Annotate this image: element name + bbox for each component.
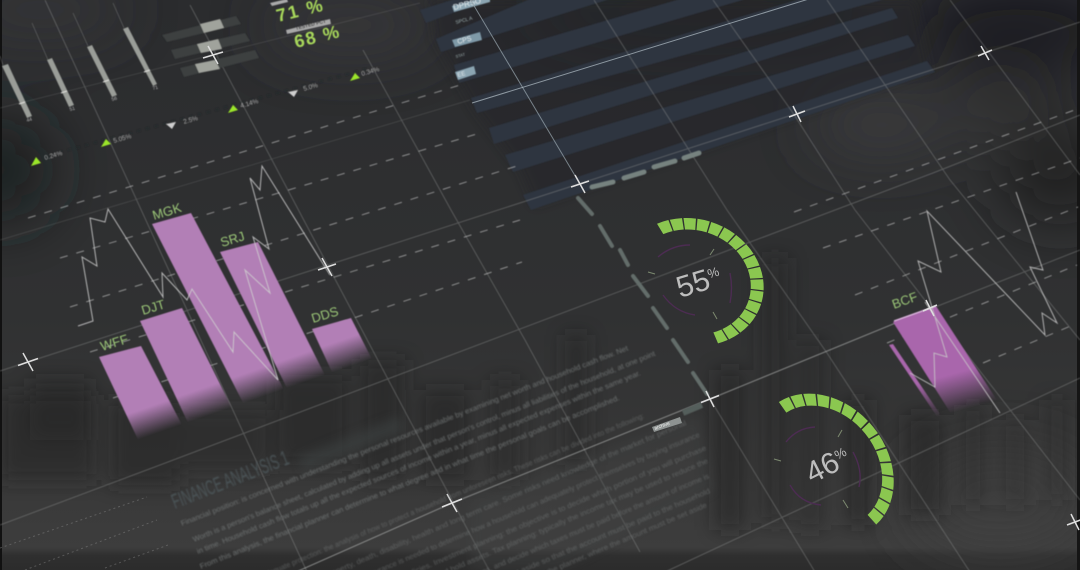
band labels	[452, 0, 490, 80]
right purple bar BCF: BCF	[890, 289, 920, 312]
right wave line	[910, 192, 1057, 413]
gauge: 46 percent: 46	[800, 446, 845, 490]
grey vertical bars chart	[0, 3, 159, 124]
purple bar chart: DJT	[139, 297, 167, 318]
trend indicator row: 5.0%	[303, 82, 319, 93]
dark shading behind data bands	[430, 0, 930, 205]
grey vertical bars chart: 56	[111, 96, 118, 103]
horizontal slider bars	[162, 16, 259, 77]
first paragraph: in time. Household cash flow totals up all the expected sources of income within a year, minus all expected expenses within the same year.	[195, 368, 642, 556]
trend indicator row: 5.05%	[113, 133, 132, 145]
purple bar chart: WFF	[98, 331, 130, 354]
bright grid line across bands	[470, 0, 580, 184]
faint dotted lines lower left	[0, 497, 168, 570]
left wave line	[78, 166, 330, 380]
gauge: 55 percent: 55	[672, 263, 714, 305]
purple bar chart: MGK	[150, 200, 184, 223]
trend indicator row: 4.14%	[240, 98, 259, 110]
gauge: 55 percent: %	[705, 264, 721, 282]
trend indicator row: 0.24%	[44, 150, 63, 162]
trend indicator row	[31, 66, 380, 166]
percent readouts top: TESTED PCT	[295, 19, 327, 32]
dashed guide lines	[28, 85, 1080, 398]
bright highlight line across bands	[472, 0, 812, 103]
band labels: CPS	[457, 35, 473, 46]
thick grey dashed axis segments	[578, 153, 707, 413]
right purple bar BCF	[889, 289, 1000, 420]
trend indicator row: 2.5%	[183, 115, 199, 126]
bar: WFF	[99, 346, 195, 465]
trend indicator row: 0.34%	[361, 66, 380, 78]
readout 68 percent: 68 %	[292, 21, 343, 52]
band labels: STAT	[455, 52, 466, 59]
gauge: 46 percent	[734, 376, 914, 556]
finance text panel: archive	[654, 421, 671, 432]
heading: finance analysis: FINANCE ANALYSIS 1	[168, 447, 292, 514]
purple bar chart	[98, 200, 385, 480]
blue horizontal data bands	[420, 0, 935, 210]
gauge: 55 percent	[603, 205, 781, 359]
first paragraph: From this analysis, the financial planner can determine to what degree and in what time the personal goals can be accomplished.	[198, 393, 621, 570]
bar: DDS	[312, 318, 385, 400]
grey vertical bars chart: 71	[152, 85, 159, 92]
bright grid line through text panel	[296, 313, 920, 570]
grey vertical bars chart: 44	[26, 117, 33, 124]
bar: DJT	[140, 308, 258, 480]
band labels: SPCL A	[455, 15, 474, 26]
small tag	[652, 417, 682, 432]
bar: SRJ	[220, 242, 345, 425]
purple bar chart: SRJ	[218, 228, 246, 250]
grey vertical bars chart: 51	[69, 106, 76, 113]
finance text panel	[168, 343, 714, 570]
gauge: 46 percent: %	[832, 444, 849, 463]
bar: MGK	[152, 213, 300, 440]
purple bar chart: DDS	[309, 303, 340, 326]
percent readouts top	[270, 0, 343, 52]
band labels: EE	[457, 71, 466, 79]
first paragraph: Worth is a person's balance sheet, calculated by adding up all assets under that person's control, minus all liabilities of the household, at one point	[191, 349, 657, 544]
first paragraph: Financial position: is concerned with understanding the personal resources available by examining net worth and household cash flow. Net	[179, 343, 630, 528]
